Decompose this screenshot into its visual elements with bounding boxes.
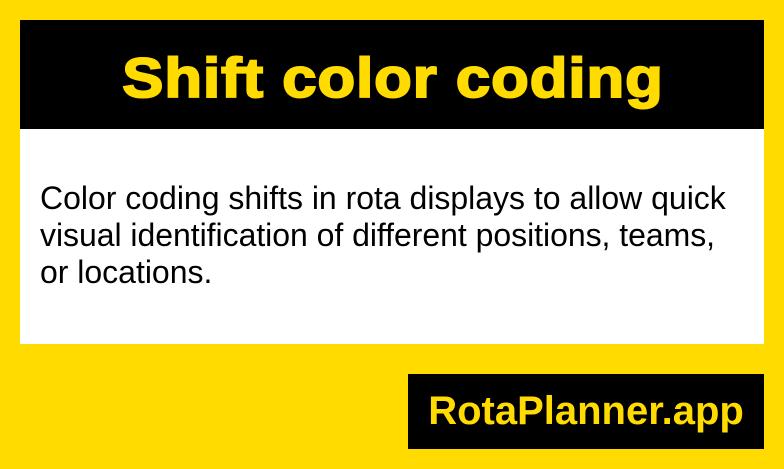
text block: description <box>40 180 726 290</box>
panel: description <box>20 129 764 344</box>
header banner <box>20 20 764 129</box>
brand badge: RotaPlanner.app <box>428 389 744 433</box>
text block: description: Color coding shifts in rota displays to allow quick <box>40 180 726 216</box>
title: Shift color coding <box>122 46 664 109</box>
text block: description: visual identification of different positions, teams, <box>40 217 715 253</box>
text block: description: or locations. <box>40 254 212 290</box>
brand badge <box>408 374 764 449</box>
